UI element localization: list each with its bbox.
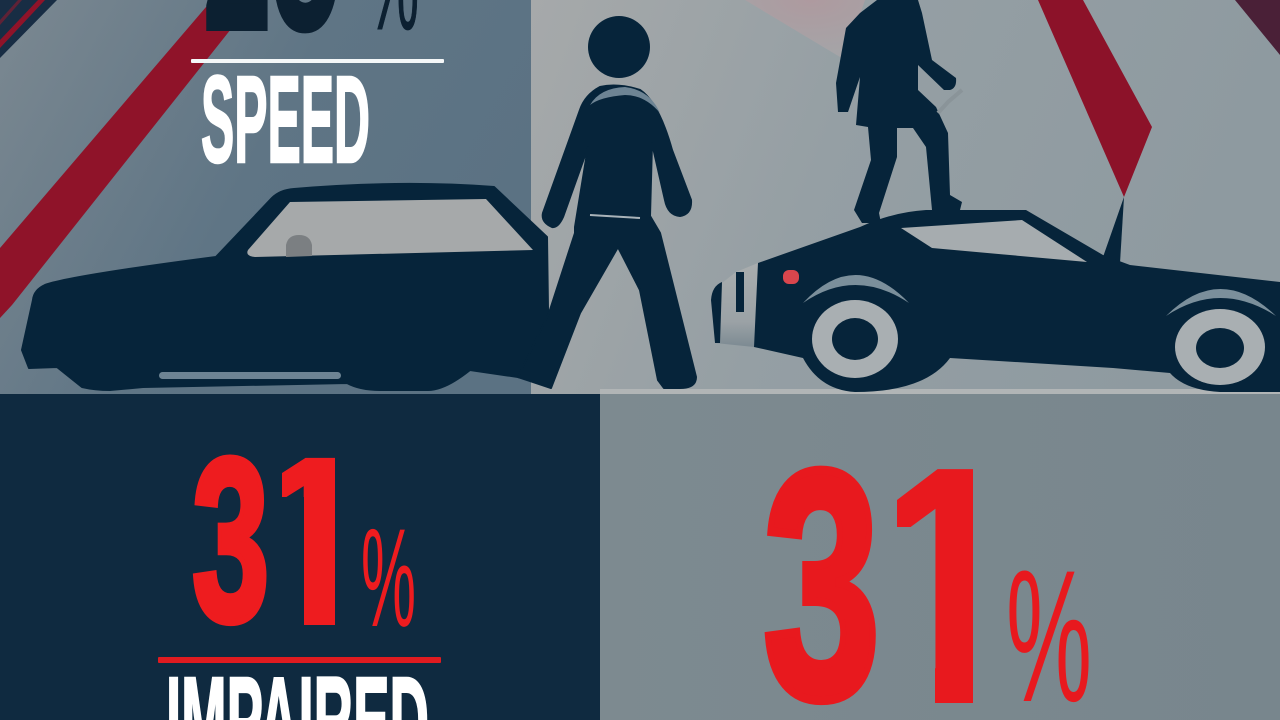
car window <box>247 199 533 257</box>
driver head <box>286 235 312 257</box>
stat: impaired 31 percent: 1 <box>247 406 382 677</box>
road stripe: top left corner <box>0 0 57 58</box>
stat: impaired 31 percent: 3 <box>192 410 269 670</box>
red tie shaped arrow right <box>1038 0 1152 197</box>
icon: front bumper and grille <box>711 263 758 347</box>
icon: person standing on car <box>836 0 962 223</box>
panel: upper right background <box>531 0 1280 394</box>
stat: impaired 31 percent <box>192 454 414 627</box>
stat: large 31 percent <box>764 466 1089 706</box>
shoulder highlight <box>590 87 660 113</box>
car sill highlight <box>159 372 341 379</box>
car window <box>901 220 1087 262</box>
panel: lower right grey background <box>600 394 1280 720</box>
panel: upper left background <box>0 0 531 394</box>
divider: impaired <box>158 657 441 663</box>
text: % <box>361 499 416 656</box>
icon: right car silhouette <box>754 197 1280 392</box>
pink glow shape <box>745 0 865 60</box>
red indicator light <box>783 270 799 284</box>
rear wheel arch <box>1166 289 1276 316</box>
front wheel <box>812 300 898 378</box>
front wheel arch <box>803 275 909 303</box>
icon: left car silhouette <box>22 184 549 390</box>
divider: speed <box>191 59 444 63</box>
red diagonal stripe left <box>0 0 254 318</box>
ground line <box>600 389 1280 394</box>
text: SPEED <box>201 52 370 189</box>
rear wheel <box>1175 309 1265 385</box>
belt highlight <box>590 215 640 218</box>
bottle in hand <box>938 90 962 113</box>
icon: standing person <box>518 16 696 388</box>
panel: impaired navy background <box>0 394 600 720</box>
road stripe: top right corner <box>1235 0 1280 55</box>
